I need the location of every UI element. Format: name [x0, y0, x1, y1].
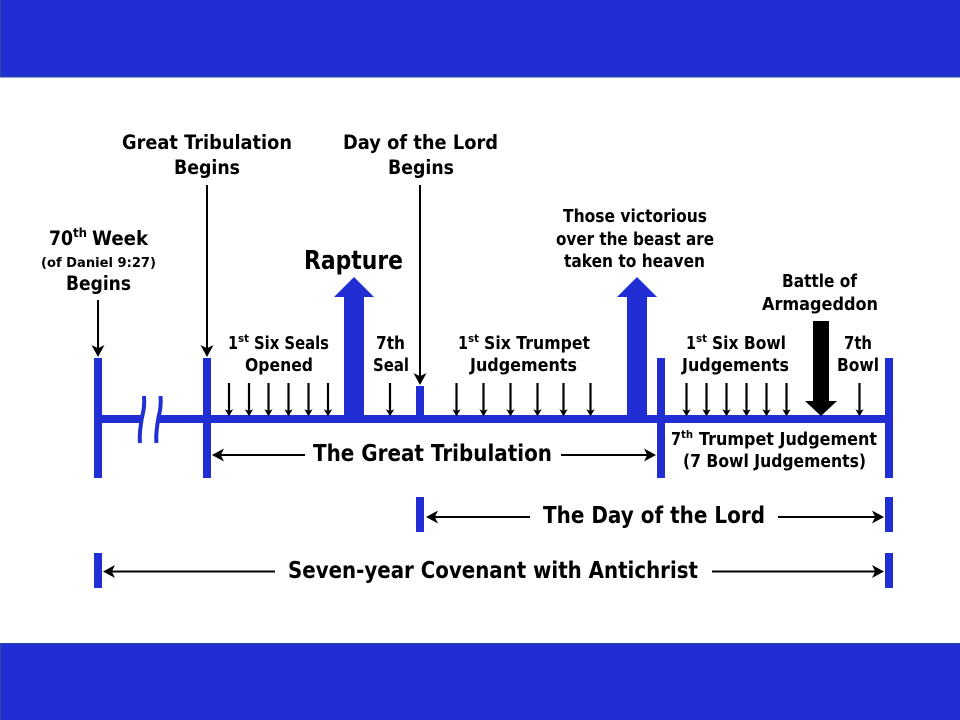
label: 1st six trumpet judgements: 1: [458, 333, 468, 354]
heading: 70th Week Begins: th: [73, 226, 87, 240]
bottom band: [0, 644, 960, 720]
heading: 70th Week Begins: (of Daniel 9:27): [41, 255, 156, 271]
heading: Great Tribulation Begins: Great Tribulation: [122, 131, 292, 154]
label: 1st six seals opened: [228, 332, 329, 376]
arrows: six seals: [229, 383, 328, 415]
heading: 70th Week Begins: 70: [49, 227, 73, 250]
heading: Day of the Lord Begins: Begins: [388, 156, 454, 179]
top band: [0, 0, 960, 77]
arrow: day of the lord begins: [419, 185, 421, 384]
arrows: six trumpets: [456, 383, 590, 415]
heading: Great Tribulation Begins: [122, 131, 292, 179]
label: 7th seal: 7th: [376, 333, 405, 354]
span: The Day of the Lord: The Day of the Lord: [543, 503, 765, 529]
label: 1st six bowl judgements: Six Bowl: [712, 333, 786, 354]
timeline break mark: [140, 396, 161, 443]
label: 7th trumpet judgement: [671, 428, 877, 472]
span: The Great Tribulation: The Great Tribulation: [313, 441, 552, 467]
label: 1st six trumpet judgements: Six Trumpet: [484, 333, 590, 354]
label: 1st six bowl judgements: Judgements: [680, 355, 789, 376]
label: 7th bowl: 7th: [844, 333, 872, 354]
label: those victorious: over the beast are: [556, 229, 714, 250]
timeline axis: [94, 358, 893, 478]
label: 1st six seals opened: st: [238, 332, 249, 345]
span: Seven-year Covenant with Antichrist: Seven-year Covenant with Antichrist: [288, 558, 698, 584]
arrow: 7th seal: [389, 383, 391, 415]
label: those victorious: Those victorious: [563, 206, 707, 227]
heading: Day of the Lord Begins: Day of the Lord: [343, 131, 498, 154]
label: 7th trumpet judgement: (7 Bowl Judgements): [683, 451, 866, 472]
label: 7th bowl: [837, 333, 879, 376]
arrow: battle of armageddon: [805, 321, 837, 416]
label: 1st six trumpet judgements: st: [468, 332, 479, 345]
label: Rapture: Rapture: [304, 246, 403, 276]
label: 1st six seals opened: Opened: [245, 355, 313, 376]
label: those victorious: taken to heaven: [564, 251, 705, 272]
arrow: rapture: [334, 277, 374, 416]
label: 7th trumpet judgement: th: [681, 428, 693, 441]
heading: 70th Week Begins: Begins: [66, 272, 131, 295]
label: 1st six seals opened: Six Seals: [254, 333, 329, 354]
label: battle of armageddon: [762, 271, 878, 315]
arrows: six bowls: [686, 383, 786, 415]
label: 7th bowl: Bowl: [837, 355, 879, 376]
label: battle of armageddon: Battle of: [782, 271, 857, 292]
heading: 70th Week Begins: Week: [92, 227, 149, 250]
span: The Day of the Lord: [416, 497, 893, 532]
label: those victorious: [556, 206, 714, 272]
label: 7th seal: Seal: [373, 355, 409, 376]
label: 7th trumpet judgement: Trumpet Judgement: [699, 429, 877, 450]
label: 1st six bowl judgements: st: [696, 332, 707, 345]
label: 1st six trumpet judgements: Judgements: [468, 355, 577, 376]
arrow: 7th bowl: [858, 383, 861, 415]
heading: 70th Week Begins: [41, 226, 156, 295]
label: 1st six seals opened: 1: [228, 333, 238, 354]
label: 1st six trumpet judgements: [458, 332, 590, 376]
span: Seven-year Covenant with Antichrist: [94, 553, 893, 588]
heading: Great Tribulation Begins: Begins: [174, 156, 240, 179]
arrow: taken to heaven: [617, 277, 657, 416]
label: 1st six bowl judgements: 1: [686, 333, 696, 354]
arrow: 70th week begins: [97, 300, 99, 356]
label: 7th trumpet judgement: 7: [671, 429, 681, 450]
label: battle of armageddon: Armageddon: [762, 294, 878, 315]
arrow: great tribulation begins: [206, 185, 208, 356]
label: 7th seal: [373, 333, 409, 376]
label: 1st six bowl judgements: [680, 332, 789, 376]
heading: Day of the Lord Begins: [343, 131, 498, 179]
